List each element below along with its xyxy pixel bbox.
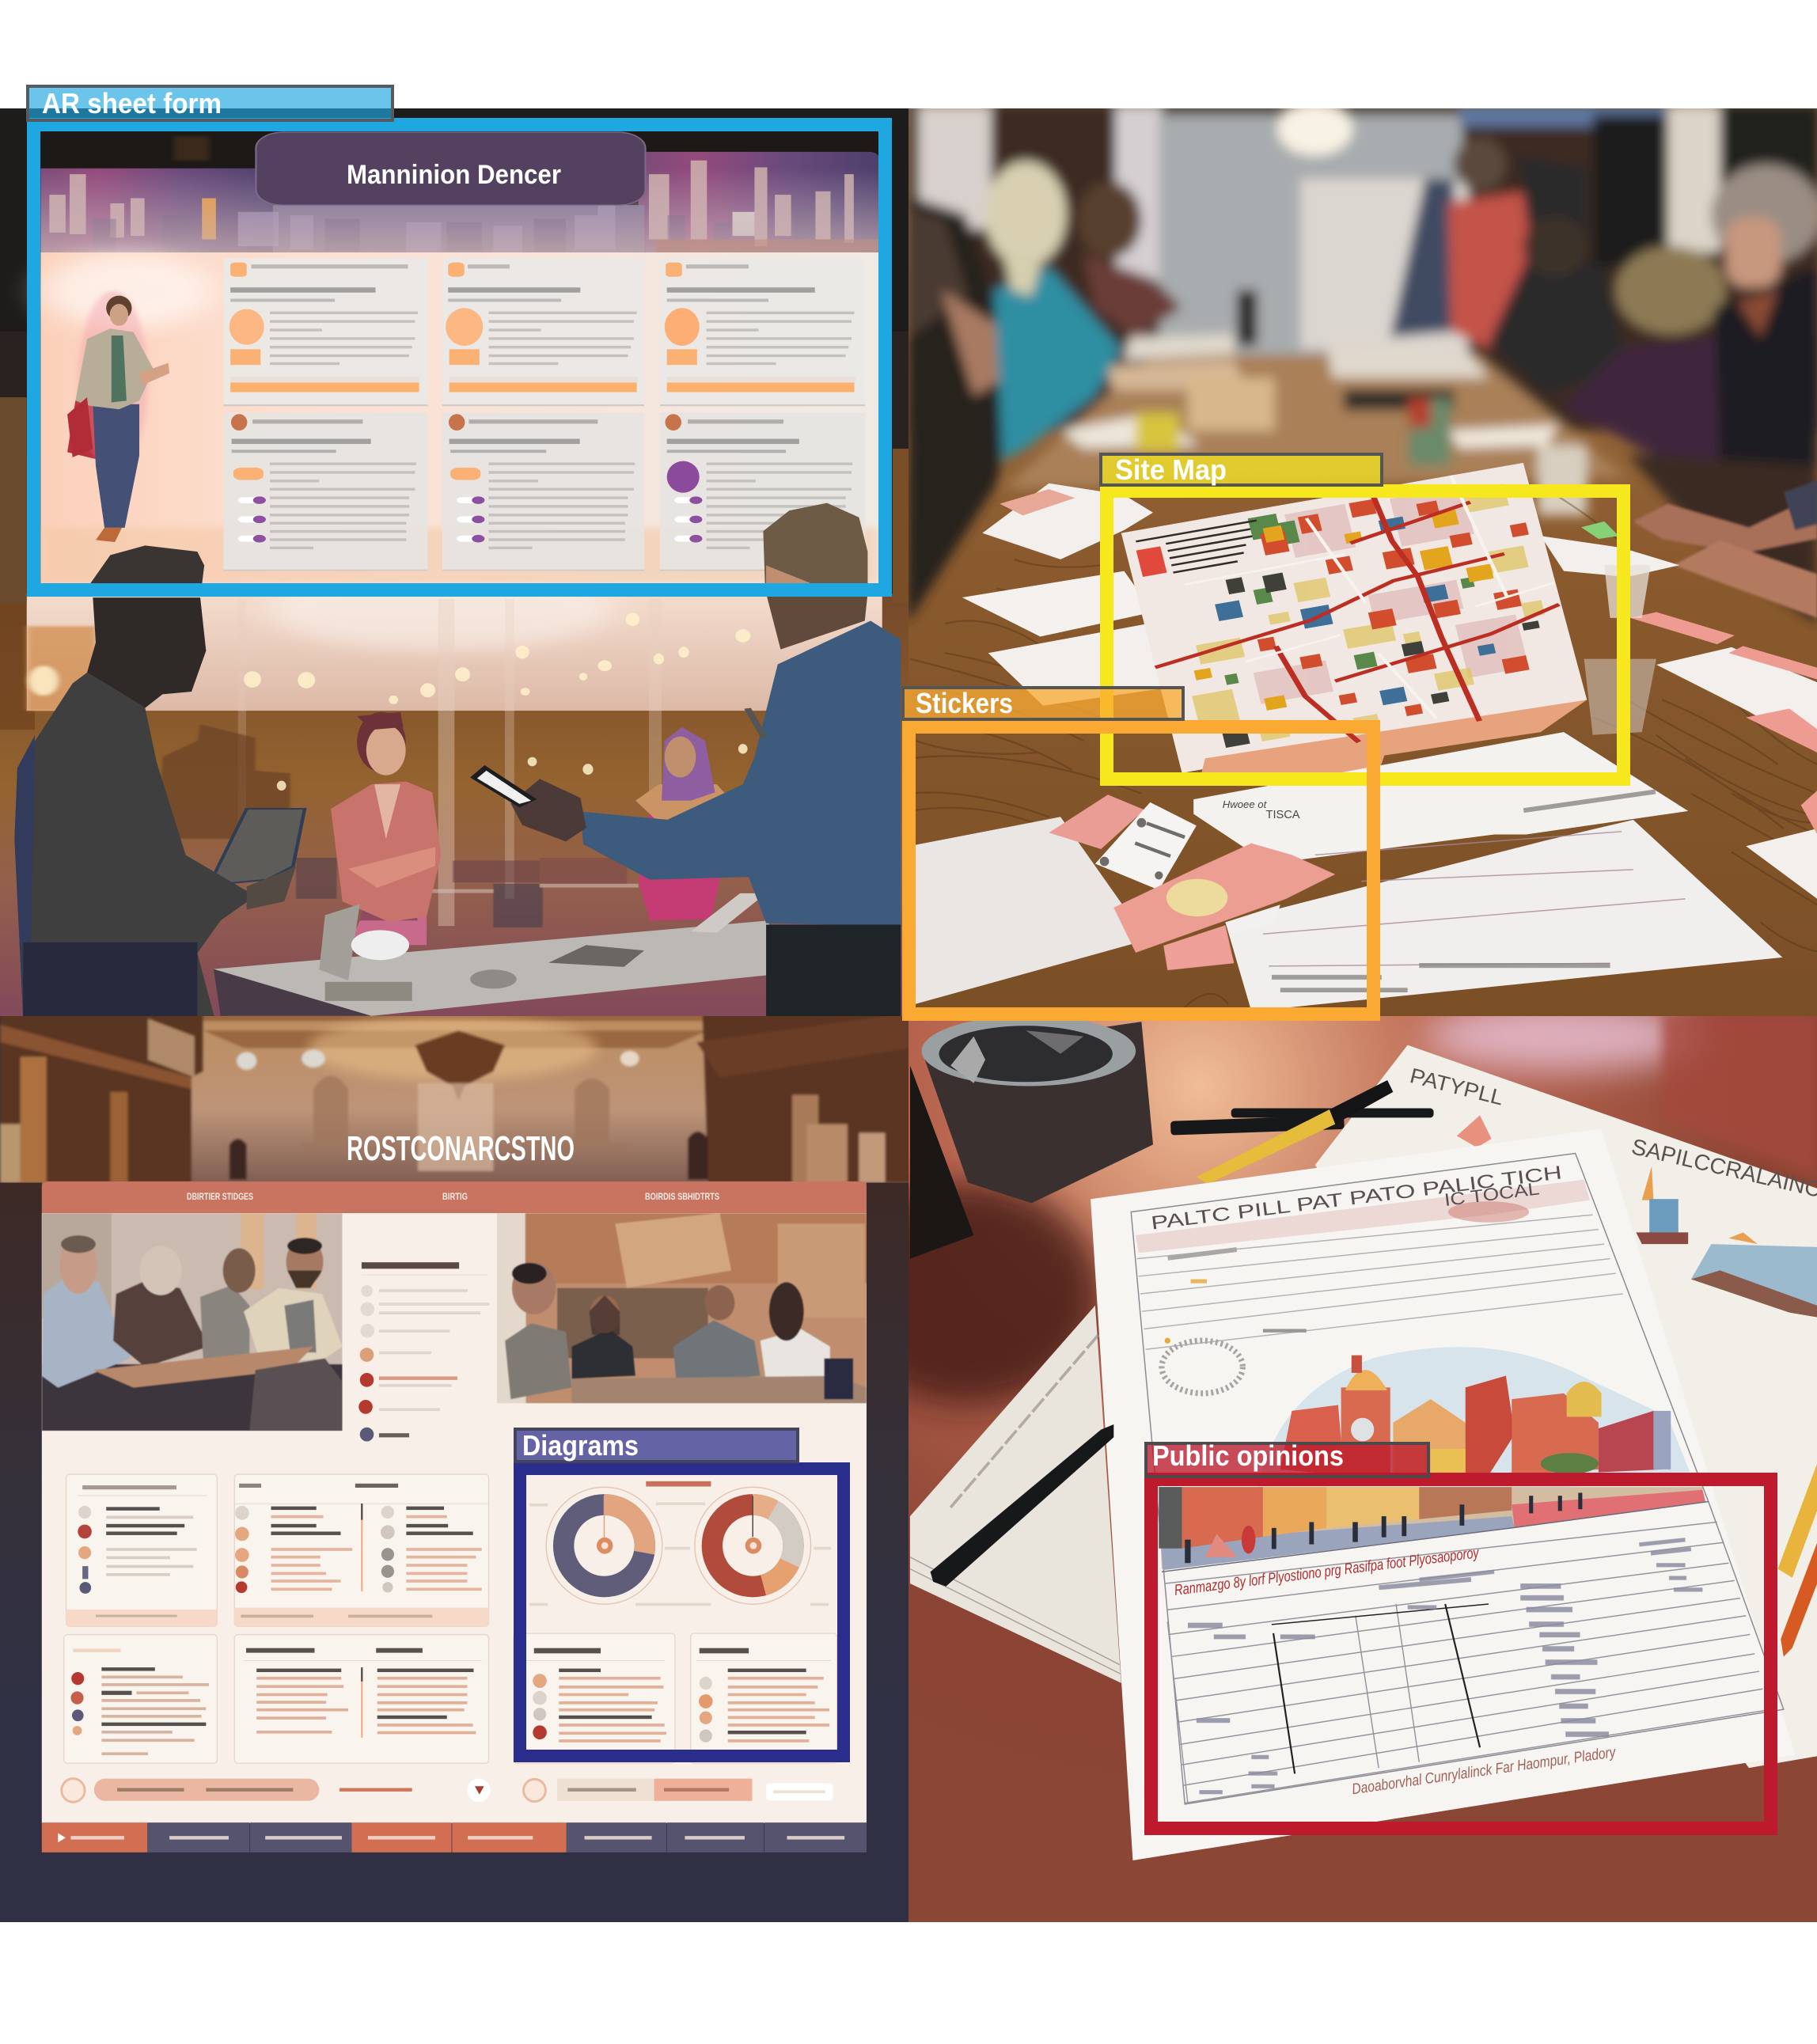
info box A: [66, 1474, 217, 1626]
label: Diagrams: Diagrams: [522, 1429, 639, 1462]
blurred background of the room: [907, 103, 1817, 624]
dashboard header labels: BOIRDIS SBHIDTRTS: [645, 1191, 719, 1202]
woman in pink jacket: [331, 712, 441, 945]
dashboard header labels: [187, 1191, 719, 1202]
center checklist: [358, 1262, 489, 1442]
building silhouette: [157, 724, 290, 839]
wall arches: [229, 1132, 708, 1180]
left sheet: [910, 1306, 1121, 1683]
info box C: [64, 1635, 217, 1763]
card 6: [660, 413, 865, 571]
bokeh lights: [28, 612, 750, 791]
left man with tablet: [14, 597, 305, 1018]
right man with phone: [470, 593, 901, 1018]
card 2: [442, 258, 644, 406]
card 5: [442, 413, 644, 571]
card 1: [223, 258, 428, 406]
room scene below the AR sheet: [0, 103, 910, 1030]
orange header bar: [42, 1181, 867, 1213]
papers left on the table: [962, 484, 1817, 899]
left group photo: [41, 1213, 343, 1431]
heads of foreground men overlapping the sheet: [90, 503, 867, 584]
donut chart panel: [514, 1464, 850, 1762]
row 2 cards: [223, 413, 865, 571]
title: Manninion Dencer: Manninion Dencer: [347, 160, 561, 190]
desk pens: [931, 1424, 1817, 1657]
right donut chart: [695, 1487, 811, 1604]
lower handwritten sheets: Hwoee ot: [1223, 798, 1268, 810]
opinion table: Daoaborvhal Cunrylalinck Far Haompur, Pladory: [1351, 1744, 1618, 1798]
ceiling beams: [203, 1013, 708, 1048]
glass and paper mug: [1604, 565, 1651, 618]
left shelves: [0, 1013, 203, 1183]
frame: Diagrams: [520, 1469, 844, 1756]
skyline banner: [40, 152, 878, 253]
wood grain: [910, 489, 1817, 1010]
frame: Stickers: [908, 726, 1374, 1014]
right group photo: [497, 1213, 867, 1404]
dashboard header labels: BIRTIG: [442, 1191, 468, 1202]
woman with purple hair: [635, 727, 734, 920]
label: Stickers: [903, 687, 1183, 719]
label: Public opinions: Public opinions: [1152, 1439, 1344, 1472]
form background: [40, 252, 878, 584]
dashboard header labels: DBIRTIER STIDGES: [187, 1191, 253, 1202]
label: Site Map: [1101, 453, 1382, 486]
info box E: [514, 1633, 675, 1763]
panel: AR presentation room with AR sheet form: [0, 103, 910, 1030]
back sheet with drawings: PATYPLL: [1408, 1064, 1506, 1110]
info box F: [691, 1633, 837, 1763]
left donut chart: [546, 1487, 662, 1604]
panel: community workshop dashboard: [0, 1013, 910, 1926]
bottom navigation bar: [42, 1822, 867, 1852]
title pill: [256, 132, 646, 205]
panel: workshop table photo: [907, 103, 1817, 1022]
main planning sheet: [1091, 1128, 1795, 1860]
AR sheet form content: [0, 108, 910, 603]
right shelves: [702, 1013, 910, 1183]
main planning sheet: PALTC PILL PAT PATO PALIC TICH: [1150, 1162, 1563, 1234]
opinion table: [1162, 1502, 1772, 1803]
people: [907, 196, 1006, 624]
white table: [214, 920, 769, 1016]
site map drawing: [1121, 463, 1587, 787]
cup: [910, 1016, 1153, 1259]
label: AR sheet form: AR sheet form: [42, 87, 222, 119]
main planning sheet: IC TOCAL: [1443, 1178, 1540, 1210]
label: Site Map: Site Map: [1115, 453, 1227, 486]
panel: public planning sheet on red desk: [835, 1001, 1817, 1926]
label: Stickers: Stickers: [916, 687, 1013, 719]
hall background: [0, 1013, 910, 1189]
furniture: [296, 858, 639, 927]
label: Diagrams: [515, 1429, 798, 1462]
stickers: [1049, 794, 1335, 970]
presenter figure: [67, 291, 169, 542]
card 4: [223, 413, 428, 571]
beige dashboard sheet: [42, 1213, 867, 1823]
frame: AR sheet form: [33, 125, 885, 590]
label: Public opinions: [1146, 1439, 1428, 1477]
table far end: [1003, 355, 1627, 489]
lower handwritten sheets: TISCA: [1266, 809, 1300, 821]
back sheet with drawings: [1315, 1045, 1817, 1768]
row 1 cards: [223, 258, 865, 406]
chandelier: [415, 1030, 505, 1101]
pens at the top: [1170, 1080, 1434, 1184]
bottom control row: [62, 1779, 833, 1802]
back sheet with drawings: SAPILCCRALAINC: [1629, 1134, 1817, 1202]
label: AR sheet form: [28, 86, 393, 120]
watercolor town illustration: [1159, 1347, 1705, 1570]
info box B: [234, 1474, 489, 1626]
info box D: [234, 1635, 489, 1763]
opinion table: Ranmazgo 8y lorf Plyostiono prg Rasifpa foot Plyosaoporoy: [1174, 1545, 1481, 1599]
arm on the right: [1633, 480, 1817, 618]
lower handwritten sheets: [915, 732, 1782, 1011]
frame: Site Map: [1106, 491, 1624, 779]
frame: Public opinions: [1151, 1480, 1771, 1828]
title: Rostconarcstno: ROSTCONARCSTNO: [347, 1129, 575, 1168]
card 3: [660, 258, 865, 406]
